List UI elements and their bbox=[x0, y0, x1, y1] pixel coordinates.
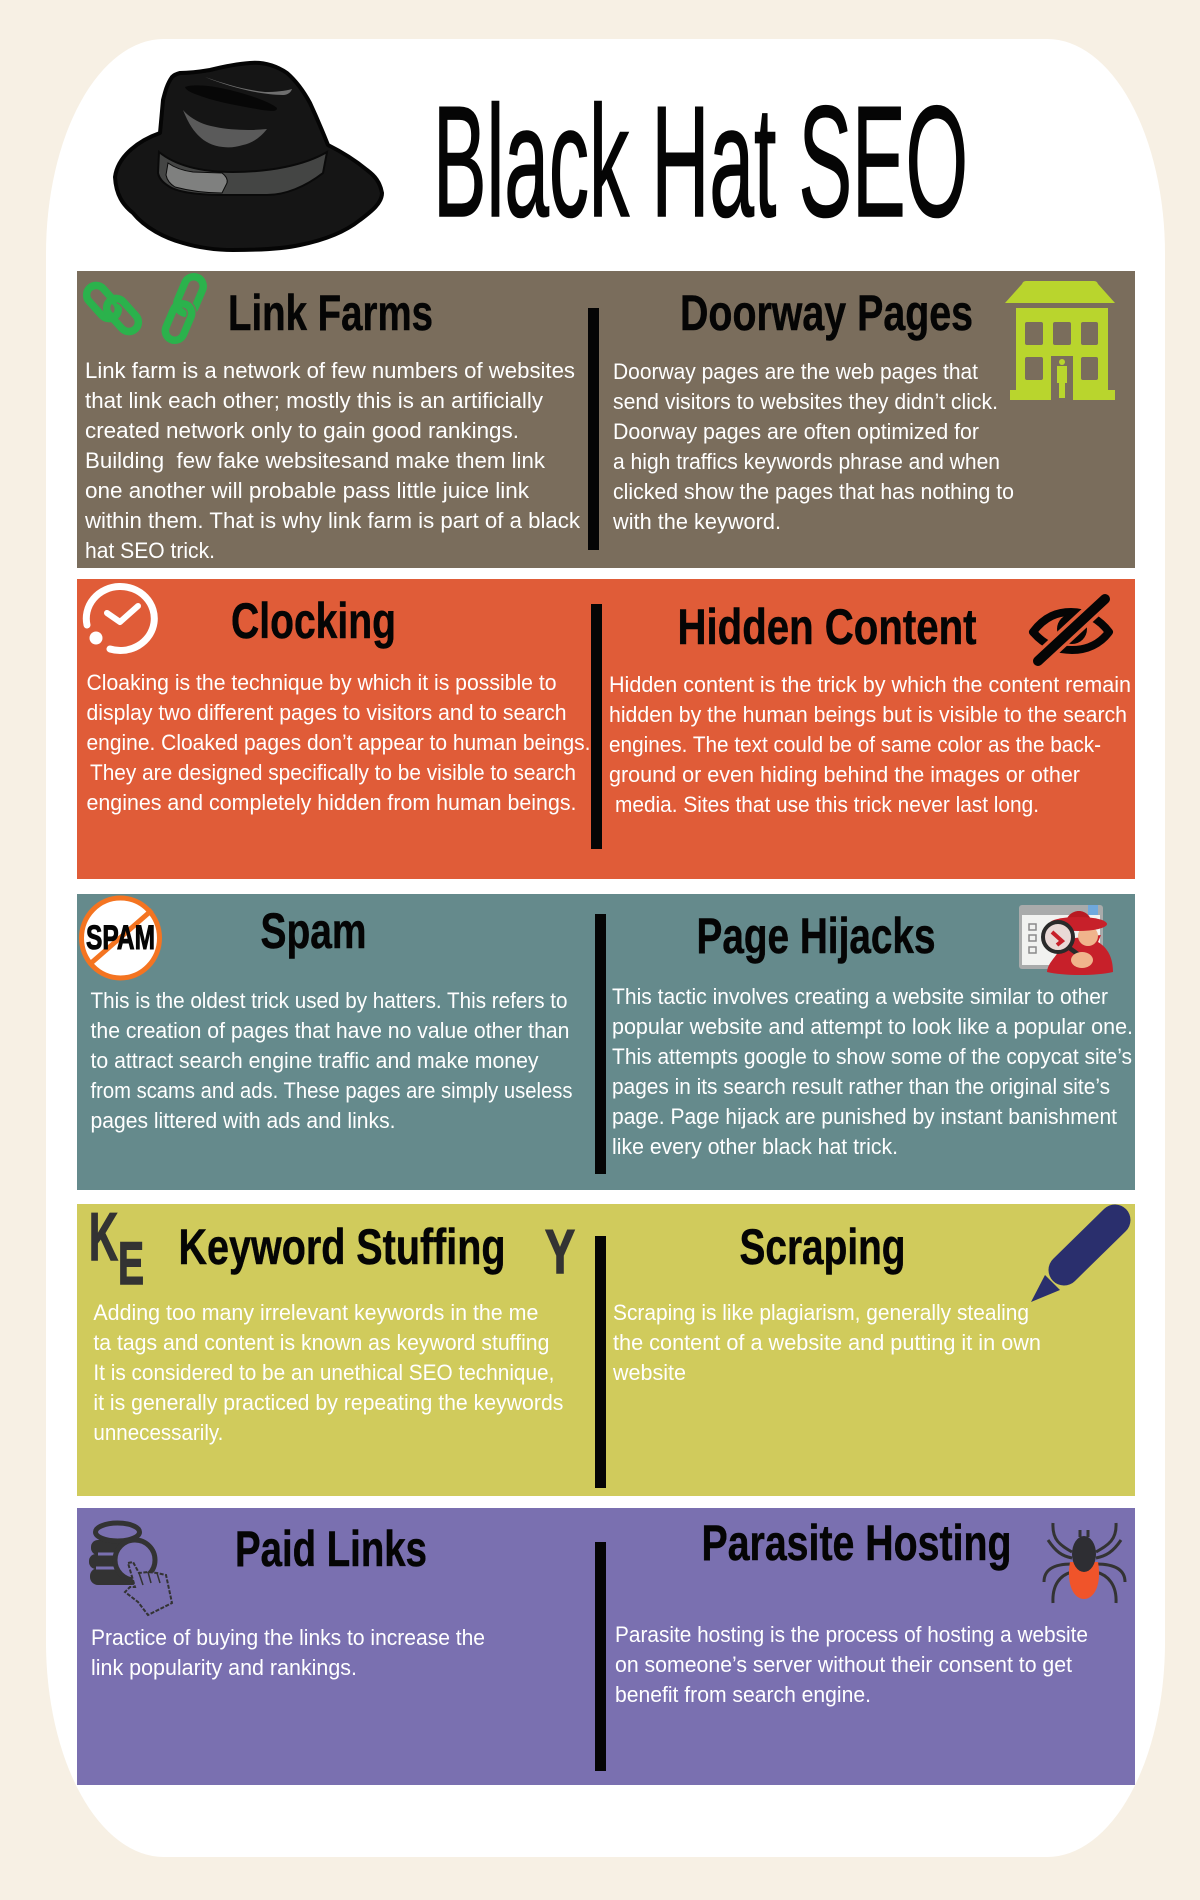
divider bbox=[591, 604, 602, 849]
icon: letter E: E bbox=[118, 1230, 144, 1297]
text: link farms description bbox=[84, 358, 581, 563]
panel: spam and page hijacks bbox=[77, 894, 1135, 1190]
text: clocking description bbox=[86, 670, 590, 815]
panel: keyword stuffing and scraping bbox=[77, 1199, 1135, 1496]
text: clocking description: display two different pages to visitors and to search bbox=[86, 700, 566, 725]
divider bbox=[595, 1542, 606, 1771]
text: doorway pages description: with the keyword. bbox=[612, 509, 781, 534]
text: paid links description: link popularity and rankings. bbox=[91, 1655, 357, 1680]
text: hidden content description: hidden by the human beings but is visible to the search bbox=[609, 702, 1127, 727]
heading: parasite hosting: Parasite Hosting bbox=[702, 1515, 1012, 1571]
text: clocking description: They are designed specifically to be visible to search bbox=[90, 760, 576, 785]
text: spam description: to attract search engine traffic and make money bbox=[90, 1048, 538, 1073]
text: scraping description bbox=[612, 1300, 1041, 1385]
divider bbox=[595, 1236, 606, 1488]
panel background bbox=[77, 894, 1135, 1190]
panel background bbox=[77, 579, 1135, 879]
text: hidden content description: media. Sites that use this trick never last long. bbox=[615, 792, 1039, 817]
text: page hijacks description: This attempts google to show some of the copycat site’s bbox=[612, 1044, 1132, 1069]
text: keyword stuffing description: Adding too many irrelevant keywords in the me bbox=[93, 1300, 538, 1325]
icon: no spam sign: SPAM bbox=[86, 919, 155, 957]
text: hidden content description: engines. The text could be of same color as the back- bbox=[609, 732, 1101, 757]
text: keyword stuffing description: ta tags and content is known as keyword stuffing bbox=[93, 1330, 549, 1355]
icon: clock with check mark bbox=[86, 587, 154, 651]
text: scraping description: website bbox=[612, 1360, 686, 1385]
icon: no spam sign bbox=[82, 898, 160, 978]
text: keyword stuffing description: It is considered to be an unethical SEO technique, bbox=[93, 1360, 554, 1385]
text: parasite hosting description: Parasite hosting is the process of hosting a website bbox=[615, 1622, 1088, 1647]
panel: link farms and doorway pages bbox=[77, 271, 1135, 568]
text: link farms description: created network only to gain good rankings. bbox=[85, 418, 519, 443]
text: doorway pages description: send visitors to websites they didn’t click. bbox=[613, 389, 998, 414]
icon: letter K: K bbox=[89, 1199, 118, 1275]
text: link farms description: one another will probable pass little juice link bbox=[85, 478, 530, 503]
text: spam description bbox=[90, 988, 572, 1133]
text: scraping description: Scraping is like plagiarism, generally stealing bbox=[613, 1300, 1029, 1325]
panel background bbox=[77, 1204, 1135, 1496]
heading: page hijacks: Page Hijacks bbox=[696, 908, 936, 964]
text: keyword stuffing description: it is generally practiced by repeating the keywords bbox=[93, 1390, 563, 1415]
panel background bbox=[77, 1508, 1135, 1785]
divider bbox=[595, 914, 606, 1174]
text: spam description: the creation of pages that have no value other than bbox=[90, 1018, 570, 1043]
divider bbox=[588, 308, 599, 550]
icon: building with door bbox=[1005, 281, 1115, 400]
text: clocking description: Cloaking is the technique by which it is possible to bbox=[86, 670, 556, 695]
icon: tick parasite bbox=[1044, 1523, 1125, 1603]
heading: clocking: Clocking bbox=[231, 593, 396, 649]
text: keyword stuffing description: unnecessarily. bbox=[93, 1420, 223, 1445]
text: parasite hosting description: benefit from search engine. bbox=[615, 1682, 871, 1707]
text: page hijacks description: pages in its search result rather than the original site’s bbox=[612, 1074, 1110, 1099]
icon: chain links bbox=[83, 274, 206, 343]
text: link farms description: Building few fake websitesand make them link bbox=[85, 448, 546, 473]
heading: keyword stuffing: Keyword Stuffing bbox=[178, 1219, 506, 1275]
heading: paid links: Paid Links bbox=[235, 1521, 427, 1577]
text: page hijacks description: This tactic involves creating a website similar to other bbox=[612, 984, 1108, 1009]
text: doorway pages description: clicked show the pages that has nothing to bbox=[613, 479, 1014, 504]
panel: paid links and parasite hosting bbox=[77, 1508, 1135, 1785]
text: parasite hosting description bbox=[615, 1622, 1088, 1707]
text: page hijacks description: like every other black hat trick. bbox=[612, 1134, 898, 1159]
text: link farms description: within them. That is why link farm is part of a black bbox=[84, 508, 581, 533]
text: hidden content description bbox=[609, 672, 1131, 817]
text: paid links description bbox=[91, 1625, 485, 1680]
text: spam description: from scams and ads. These pages are simply useless bbox=[90, 1078, 572, 1103]
text: hidden content description: Hidden content is the trick by which the content remain bbox=[609, 672, 1131, 697]
icon: hijacker with magnifier over browser window bbox=[1019, 905, 1113, 975]
text: doorway pages description: Doorway pages are often optimized for bbox=[613, 419, 979, 444]
heading: scraping: Scraping bbox=[740, 1219, 906, 1275]
heading: hidden content: Hidden Content bbox=[678, 599, 977, 655]
text: page hijacks description: page. Page hijack are punished by instant banishment bbox=[612, 1104, 1117, 1129]
panel: clocking and hidden content bbox=[77, 579, 1135, 879]
text: hidden content description: ground or even hiding behind the images or other bbox=[609, 762, 1080, 787]
heading: link farms: Link Farms bbox=[228, 285, 433, 341]
text: scraping description: the content of a website and putting it in own bbox=[613, 1330, 1041, 1355]
panel background bbox=[77, 271, 1135, 568]
text: clocking description: engine. Cloaked pages don’t appear to human beings. bbox=[86, 730, 590, 755]
text: keyword stuffing description bbox=[93, 1300, 563, 1445]
icon: crossed-out eye bbox=[1033, 599, 1109, 661]
icon: pen bbox=[1031, 1220, 1115, 1302]
text: page hijacks description: popular website and attempt to look like a popular one. bbox=[612, 1014, 1133, 1039]
text: doorway pages description bbox=[612, 359, 1014, 534]
text: clocking description: engines and completely hidden from human beings. bbox=[86, 790, 576, 815]
text: link farms description: Link farm is a network of few numbers of websites bbox=[85, 358, 575, 383]
text: page hijacks description bbox=[612, 984, 1133, 1159]
text: link farms description: hat SEO trick. bbox=[85, 538, 215, 563]
text: spam description: pages littered with ads and links. bbox=[90, 1108, 396, 1133]
heading: spam: Spam bbox=[260, 903, 366, 959]
text: spam description: This is the oldest trick used by hatters. This refers to bbox=[90, 988, 568, 1013]
text: link farms description: that link each other; mostly this is an artificially bbox=[85, 388, 543, 413]
text: parasite hosting description: on someone’s server without their consent to get bbox=[615, 1652, 1072, 1677]
icon: black hat bbox=[115, 63, 382, 250]
icon: coins with pointer hand bbox=[89, 1523, 172, 1615]
text: paid links description: Practice of buying the links to increase the bbox=[91, 1625, 485, 1650]
text: doorway pages description: a high traffics keywords phrase and when bbox=[613, 449, 1000, 474]
text: doorway pages description: Doorway pages are the web pages that bbox=[613, 359, 978, 384]
heading: doorway pages: Doorway Pages bbox=[680, 285, 973, 341]
icon: letter Y: Y bbox=[545, 1218, 575, 1287]
